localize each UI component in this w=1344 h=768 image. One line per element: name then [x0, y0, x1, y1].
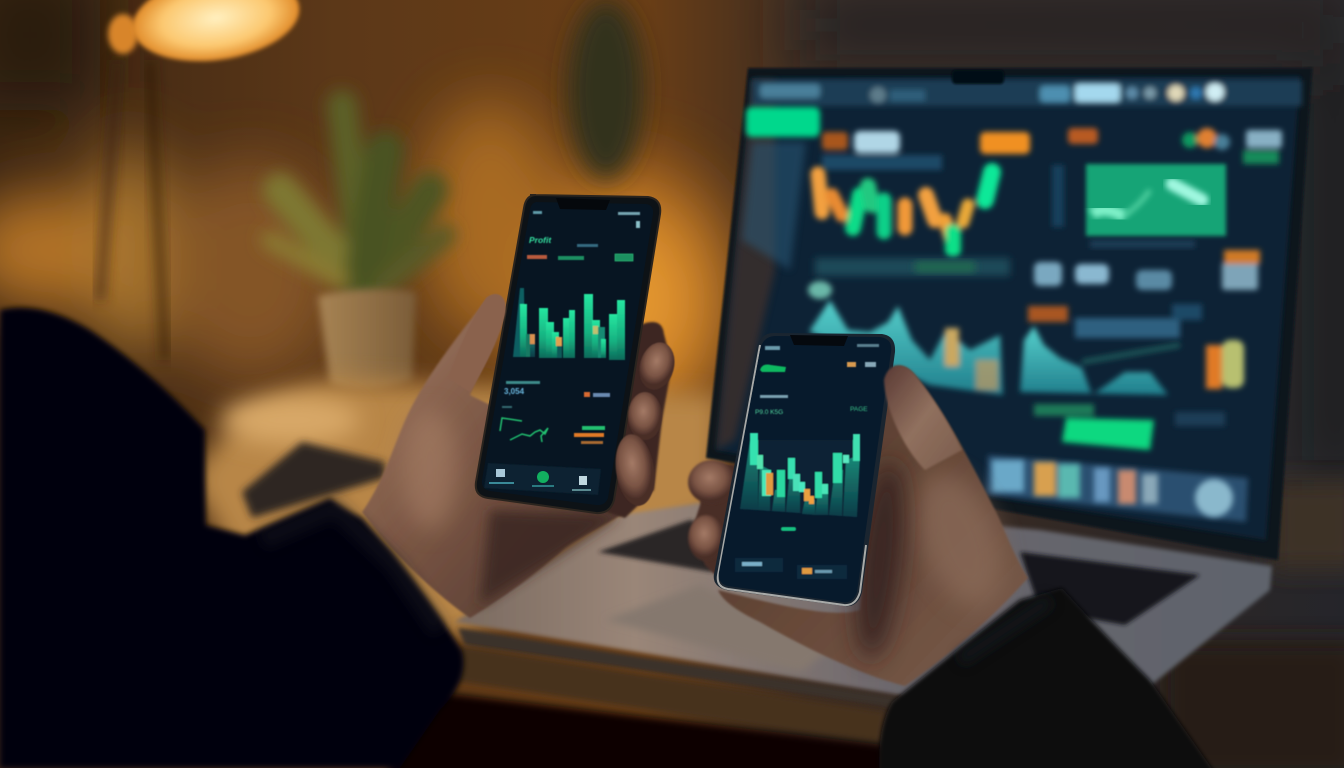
laptop area chart: [1052, 164, 1226, 248]
green button: [746, 107, 820, 137]
header row: [527, 244, 633, 261]
sidebar: [742, 142, 806, 270]
dock: [986, 455, 1248, 522]
palm highlight: [900, 461, 1020, 619]
finger backing: [692, 465, 745, 590]
keyboard right: [1020, 552, 1200, 625]
right desk: [1160, 480, 1344, 768]
wall glow: [0, 0, 1344, 480]
mini line chart: [500, 418, 548, 442]
finger backing: [600, 322, 672, 518]
sleeve knit highlight: [262, 508, 440, 630]
dark hanging plant: [568, 0, 644, 180]
bottom cards: [735, 558, 847, 579]
desk front: [450, 646, 885, 745]
left hand behind phone: [362, 295, 672, 618]
left fingers: [688, 460, 736, 504]
top bar: [752, 80, 1302, 106]
right phone: [714, 333, 895, 606]
divider green: [915, 262, 975, 272]
price labels: P9.0 K5G: [755, 409, 783, 416]
hand highlight: [402, 410, 458, 530]
notch: [556, 198, 610, 210]
notch: [952, 70, 1004, 84]
desk light: [220, 396, 360, 444]
right sleeve: [879, 588, 1220, 768]
green pill: [1034, 404, 1225, 450]
stats text: 3,054: [504, 387, 525, 396]
status: [533, 211, 640, 228]
notch: [790, 335, 848, 346]
label pill: [781, 527, 796, 531]
left hand fingers: [448, 294, 680, 508]
app title: Profit: [529, 235, 552, 245]
palm shadow: [848, 458, 912, 662]
person silhouette and left sleeve: [0, 308, 464, 768]
price label right: PAGE: [850, 406, 868, 413]
desk: [190, 380, 720, 640]
divider strip: [815, 258, 1010, 276]
right hand behind phone: [688, 366, 1028, 686]
right phone candles: [740, 433, 860, 517]
mini stats: [574, 426, 605, 444]
header chips: [822, 128, 1282, 170]
right sleeve highlight: [960, 600, 1050, 660]
keyboard left: [598, 520, 720, 572]
bottom shadow: [380, 690, 885, 768]
header: [760, 344, 879, 398]
desk objects: [242, 442, 385, 518]
small stats: [1028, 250, 1260, 338]
laptop teal chart left: [808, 281, 1003, 395]
left phone nav: [484, 463, 601, 495]
laptop base: [455, 500, 1272, 708]
right thumb: [884, 366, 962, 470]
laptop screen: [706, 68, 1312, 560]
potted plant: [270, 105, 445, 390]
laptop teal chart right: [1020, 326, 1244, 395]
laptop candle chart: [818, 172, 992, 250]
stats text: [502, 381, 610, 408]
trackpad: [605, 585, 830, 672]
laptop front edge: [458, 628, 900, 708]
left phone: [476, 195, 660, 513]
left phone bars: [513, 288, 625, 360]
lamp: [100, 0, 305, 360]
hand shadow: [480, 510, 620, 605]
